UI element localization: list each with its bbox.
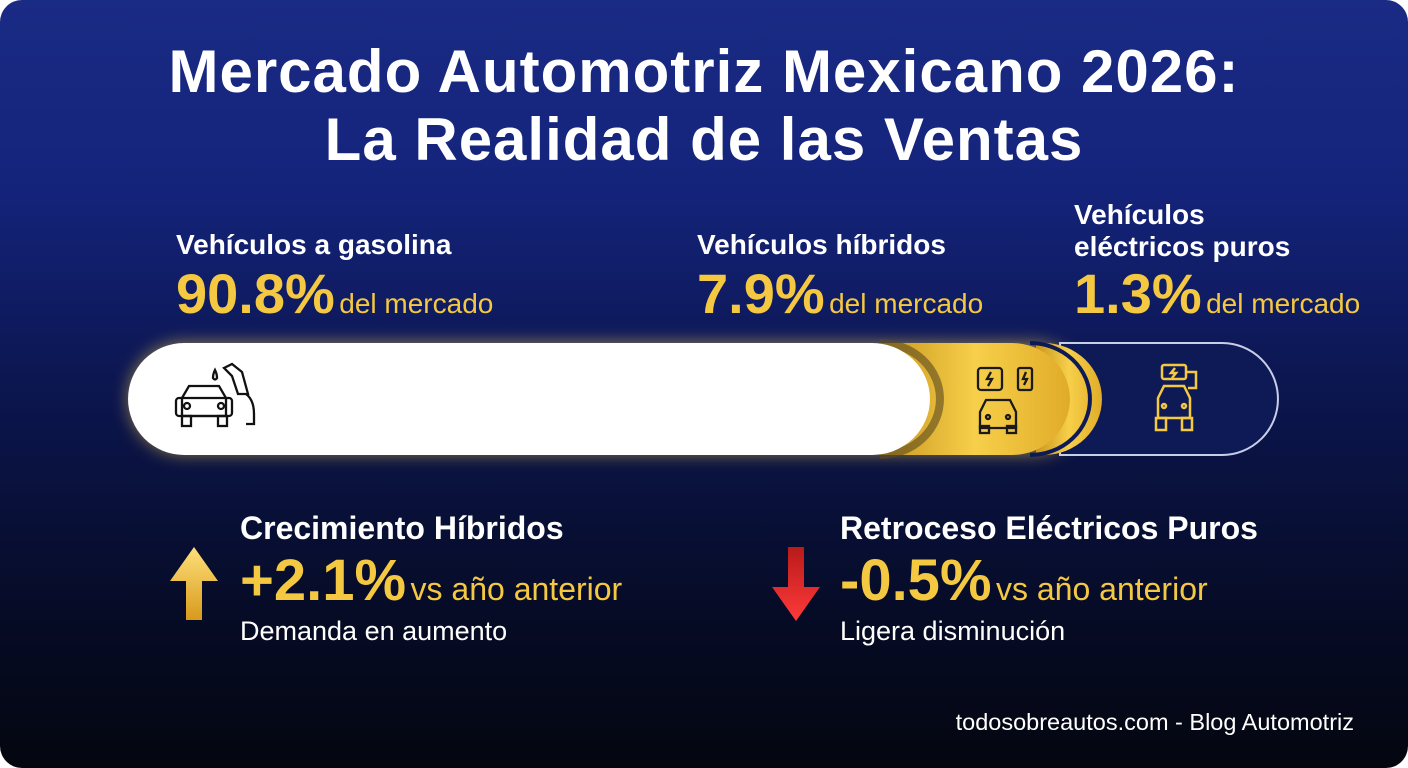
title bbox=[168, 38, 1240, 173]
segment: gasoline bbox=[128, 343, 930, 455]
label: electricos: 1.3% del mercado bbox=[1074, 262, 1360, 325]
label: gasolina: 90.8% del mercado bbox=[176, 262, 493, 325]
stacked bar chart bbox=[118, 331, 1279, 466]
stat: hibridos growth bbox=[240, 510, 622, 646]
label: electricos: eléctricos puros bbox=[1074, 231, 1290, 262]
icon: hybrid car bbox=[978, 368, 1032, 433]
title: Mercado Automotriz Mexicano 2026: bbox=[168, 38, 1240, 105]
title: La Realidad de las Ventas bbox=[325, 106, 1083, 173]
segment: hybrid bbox=[880, 343, 1070, 455]
icon: up arrow bbox=[170, 547, 218, 620]
stat: electricos decline: -0.5% vs año anterior bbox=[840, 548, 1208, 613]
label: gasolina: Vehículos a gasolina bbox=[176, 229, 451, 260]
icon: down arrow bbox=[772, 547, 820, 621]
stat: hibridos growth: Crecimiento Híbridos bbox=[240, 510, 564, 546]
segment: hybrid sliver bbox=[1036, 343, 1102, 455]
stat: electricos decline: Retroceso Eléctricos Puros bbox=[840, 510, 1258, 546]
label: gasolina bbox=[176, 229, 493, 325]
label: hibridos bbox=[697, 229, 983, 325]
icon: electric car bbox=[1156, 365, 1196, 430]
footer: todosobreautos.com - Blog Automotriz bbox=[956, 709, 1354, 735]
label: electricos bbox=[1074, 199, 1360, 325]
label: hibridos: 7.9% del mercado bbox=[697, 262, 983, 325]
stat: electricos decline bbox=[840, 510, 1258, 646]
label: electricos: Vehículos bbox=[1074, 199, 1205, 230]
stat: hibridos growth: Demanda en aumento bbox=[240, 616, 507, 646]
stat: electricos decline: Ligera disminución bbox=[840, 616, 1065, 646]
segment: electric bbox=[1060, 343, 1278, 455]
stat: hibridos growth: +2.1% vs año anterior bbox=[240, 548, 622, 613]
label: hibridos: Vehículos híbridos bbox=[697, 229, 946, 260]
icon: gasoline car bbox=[176, 364, 254, 426]
